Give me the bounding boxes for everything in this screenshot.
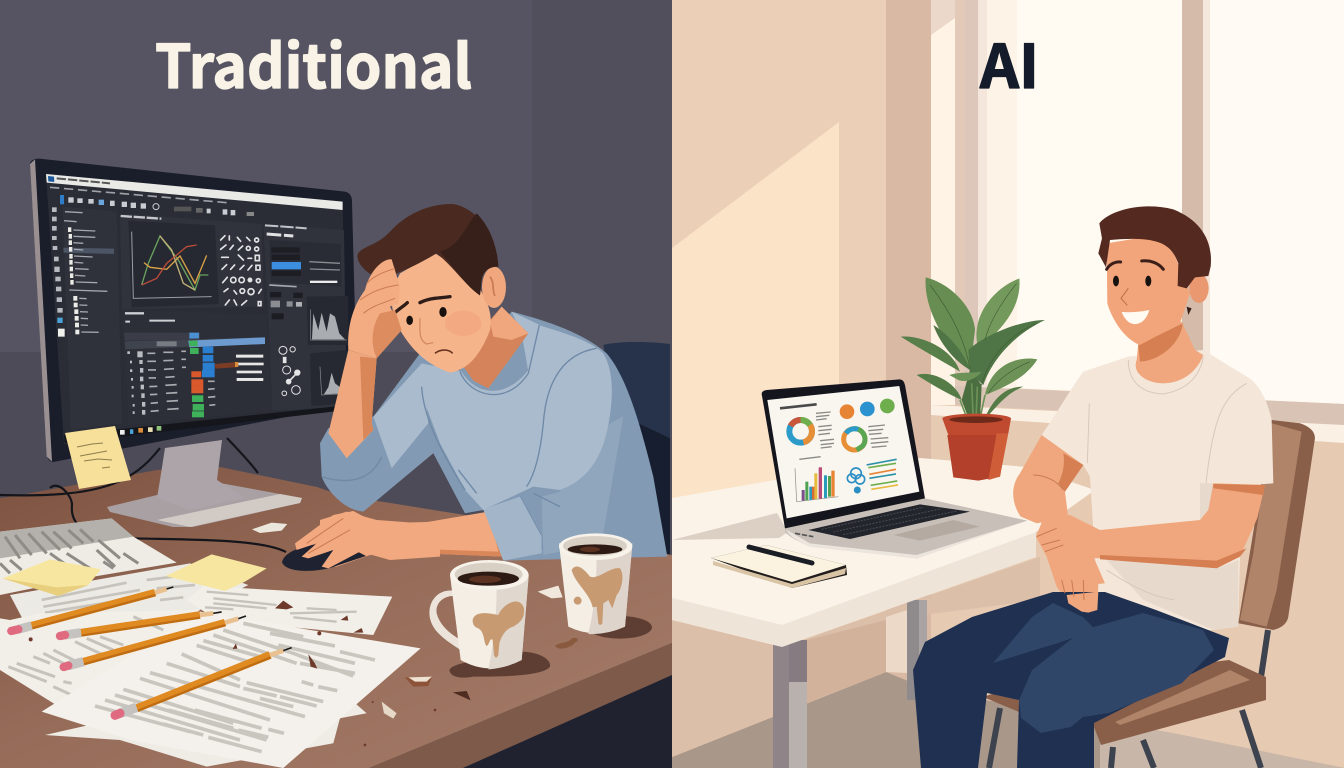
window bbox=[931, 0, 1344, 768]
monitor bbox=[30, 159, 357, 462]
plant pot bbox=[942, 414, 1011, 481]
arm shadow bbox=[420, 512, 504, 557]
cup body bbox=[559, 543, 632, 633]
coffee bbox=[568, 544, 622, 554]
desk bbox=[0, 467, 672, 768]
eyes bbox=[406, 307, 447, 325]
laptop ports bbox=[795, 533, 813, 537]
chair seat and legs bbox=[983, 630, 1268, 768]
shirt lines bbox=[1087, 357, 1247, 600]
cup shading bbox=[488, 577, 529, 669]
nose bbox=[420, 318, 433, 344]
laptop bbox=[762, 379, 1027, 558]
cup rim bbox=[559, 533, 632, 560]
pencils bbox=[11, 587, 292, 715]
face bbox=[392, 253, 491, 373]
office chair bbox=[603, 342, 670, 557]
node diagram bbox=[279, 346, 300, 396]
sticky note on monitor bbox=[65, 426, 131, 489]
jeans dark base bbox=[913, 592, 1229, 768]
cheek blush bbox=[445, 311, 482, 336]
knee highlight bbox=[1019, 613, 1214, 733]
neck shadow bbox=[1138, 323, 1183, 362]
neck bbox=[1136, 322, 1203, 383]
monitor bezel bbox=[30, 159, 357, 462]
tool strip bbox=[52, 207, 65, 337]
screen legend lines bbox=[867, 459, 898, 489]
cup shadow bbox=[449, 652, 550, 678]
taskbar bbox=[64, 405, 347, 443]
histogram inset bbox=[307, 296, 348, 345]
hand fingers over jeans bbox=[1067, 592, 1098, 613]
bar chart bbox=[795, 467, 838, 502]
mouse bbox=[282, 544, 366, 571]
desk legs bbox=[773, 600, 927, 768]
coffee stain bbox=[473, 601, 524, 657]
floor bbox=[672, 672, 1344, 768]
small area chart bbox=[310, 350, 348, 406]
knuckle lines bbox=[1033, 475, 1084, 600]
icon circles bbox=[840, 399, 895, 419]
hand on forehead bbox=[348, 259, 402, 358]
jeans bbox=[913, 592, 1229, 768]
screen heading bbox=[780, 404, 817, 408]
paper scrap bbox=[252, 523, 287, 533]
coffee stain bbox=[572, 567, 622, 625]
eyebrows bbox=[1107, 261, 1163, 269]
laptop front lip bbox=[786, 521, 1027, 558]
potted plant bbox=[901, 277, 1045, 481]
pencil 1 bbox=[11, 587, 173, 631]
cup inner bbox=[563, 536, 627, 556]
raised forearm bbox=[328, 350, 377, 458]
hair bbox=[1098, 206, 1211, 288]
pencil 3 bbox=[64, 616, 246, 667]
cup rim bbox=[450, 560, 529, 590]
cup inner bbox=[455, 563, 523, 586]
sleeve shadow on arm bbox=[1058, 453, 1083, 492]
eyebrows bbox=[394, 297, 450, 313]
face bbox=[1107, 233, 1190, 345]
chair legs bbox=[989, 630, 1268, 768]
panel: traditional side bbox=[0, 0, 672, 768]
smile bbox=[1122, 310, 1149, 324]
cup shading bbox=[588, 545, 632, 634]
small cup and desk debris bbox=[453, 586, 578, 700]
notebook bbox=[711, 545, 847, 588]
plant stems bbox=[962, 370, 982, 423]
sweater mid tone bbox=[542, 417, 623, 555]
hair dark side bbox=[440, 213, 498, 295]
frown bbox=[435, 350, 453, 353]
right arm bbox=[1036, 483, 1265, 568]
stressed person bbox=[320, 204, 667, 567]
neck bbox=[463, 307, 528, 388]
tool palette bbox=[221, 236, 261, 306]
screen text bbox=[799, 412, 888, 459]
back left sheet bbox=[0, 518, 177, 595]
smiling person bbox=[1013, 322, 1273, 630]
donut chart 2 bbox=[844, 429, 865, 450]
trackpad bbox=[893, 520, 980, 541]
right arm shadow bbox=[1100, 484, 1265, 568]
cup body bbox=[450, 575, 529, 668]
title bar bbox=[46, 174, 343, 210]
bottom sheet bbox=[45, 700, 367, 767]
t-shirt bbox=[1042, 350, 1273, 630]
forearm shadow bbox=[360, 357, 377, 440]
leaf veins bbox=[930, 283, 1037, 393]
middle left sheet bbox=[10, 563, 248, 627]
desk bbox=[672, 458, 1095, 768]
coffee bbox=[458, 572, 519, 586]
title: Traditional: Traditional bbox=[155, 19, 472, 106]
desk surface bbox=[672, 458, 1095, 625]
seat highlight bbox=[1115, 670, 1250, 725]
mug handle bbox=[429, 590, 467, 655]
nose bbox=[1121, 288, 1128, 305]
back wall bbox=[0, 0, 672, 768]
coffee puddle bbox=[555, 638, 578, 649]
hair bbox=[357, 204, 498, 295]
title: AI: AI bbox=[979, 19, 1039, 106]
panel: AI side bbox=[672, 0, 1344, 768]
neck light bbox=[490, 307, 528, 340]
data table bbox=[122, 309, 272, 425]
crumbs bbox=[453, 691, 471, 700]
laptop base bbox=[785, 498, 1027, 558]
paper stack bbox=[0, 518, 436, 768]
cables bbox=[0, 438, 286, 552]
laptop lid bbox=[762, 379, 925, 528]
sticky notes on papers bbox=[3, 554, 267, 596]
eyes bbox=[1113, 276, 1151, 286]
head of smiling person bbox=[1033, 206, 1211, 613]
ear bbox=[1187, 274, 1209, 315]
hand on mouse bbox=[295, 511, 440, 568]
layer tree panel bbox=[63, 207, 122, 430]
coffee cup front bbox=[429, 560, 550, 678]
coffee cup back bbox=[559, 533, 652, 639]
linked rings icon bbox=[847, 468, 865, 493]
back leaves bbox=[901, 277, 1045, 385]
sweater cuff bbox=[483, 497, 542, 561]
keyboard bbox=[808, 504, 970, 539]
hand bbox=[1047, 557, 1105, 613]
chart panel bbox=[120, 213, 264, 309]
toolbar bbox=[60, 195, 254, 216]
sweater lines bbox=[322, 325, 597, 550]
desk shadow bbox=[672, 513, 788, 540]
sweater light areas bbox=[373, 312, 612, 510]
monitor side edge bbox=[30, 159, 52, 462]
forearm on desk bbox=[320, 512, 504, 567]
shirt shading bbox=[1107, 483, 1238, 630]
paper scrap by cups bbox=[538, 586, 563, 598]
right properties panel bbox=[263, 223, 347, 411]
cup shadow bbox=[588, 616, 652, 639]
thigh highlight bbox=[993, 603, 1096, 663]
left upper arm bbox=[1013, 435, 1083, 523]
sweater base bbox=[320, 312, 667, 561]
laptop screen bbox=[767, 386, 919, 518]
wall bbox=[672, 0, 931, 768]
under-desk wall bbox=[672, 557, 1040, 757]
chair seat bbox=[983, 660, 1266, 745]
donut chart 1 bbox=[789, 420, 812, 443]
top sheet bbox=[42, 612, 421, 768]
desk front edge bbox=[672, 530, 1036, 647]
lower left sheet bbox=[0, 610, 200, 707]
screen bbox=[46, 174, 346, 444]
monitor stand bbox=[107, 440, 302, 527]
right sheet bbox=[187, 586, 392, 635]
front leaves bbox=[917, 358, 1037, 422]
eraser crumbs and debris bbox=[29, 601, 436, 746]
pencil 2 bbox=[60, 612, 222, 636]
chair back bbox=[1238, 420, 1315, 630]
ear bbox=[482, 267, 506, 308]
pencil 4 bbox=[115, 648, 292, 715]
line chart bbox=[132, 232, 212, 298]
